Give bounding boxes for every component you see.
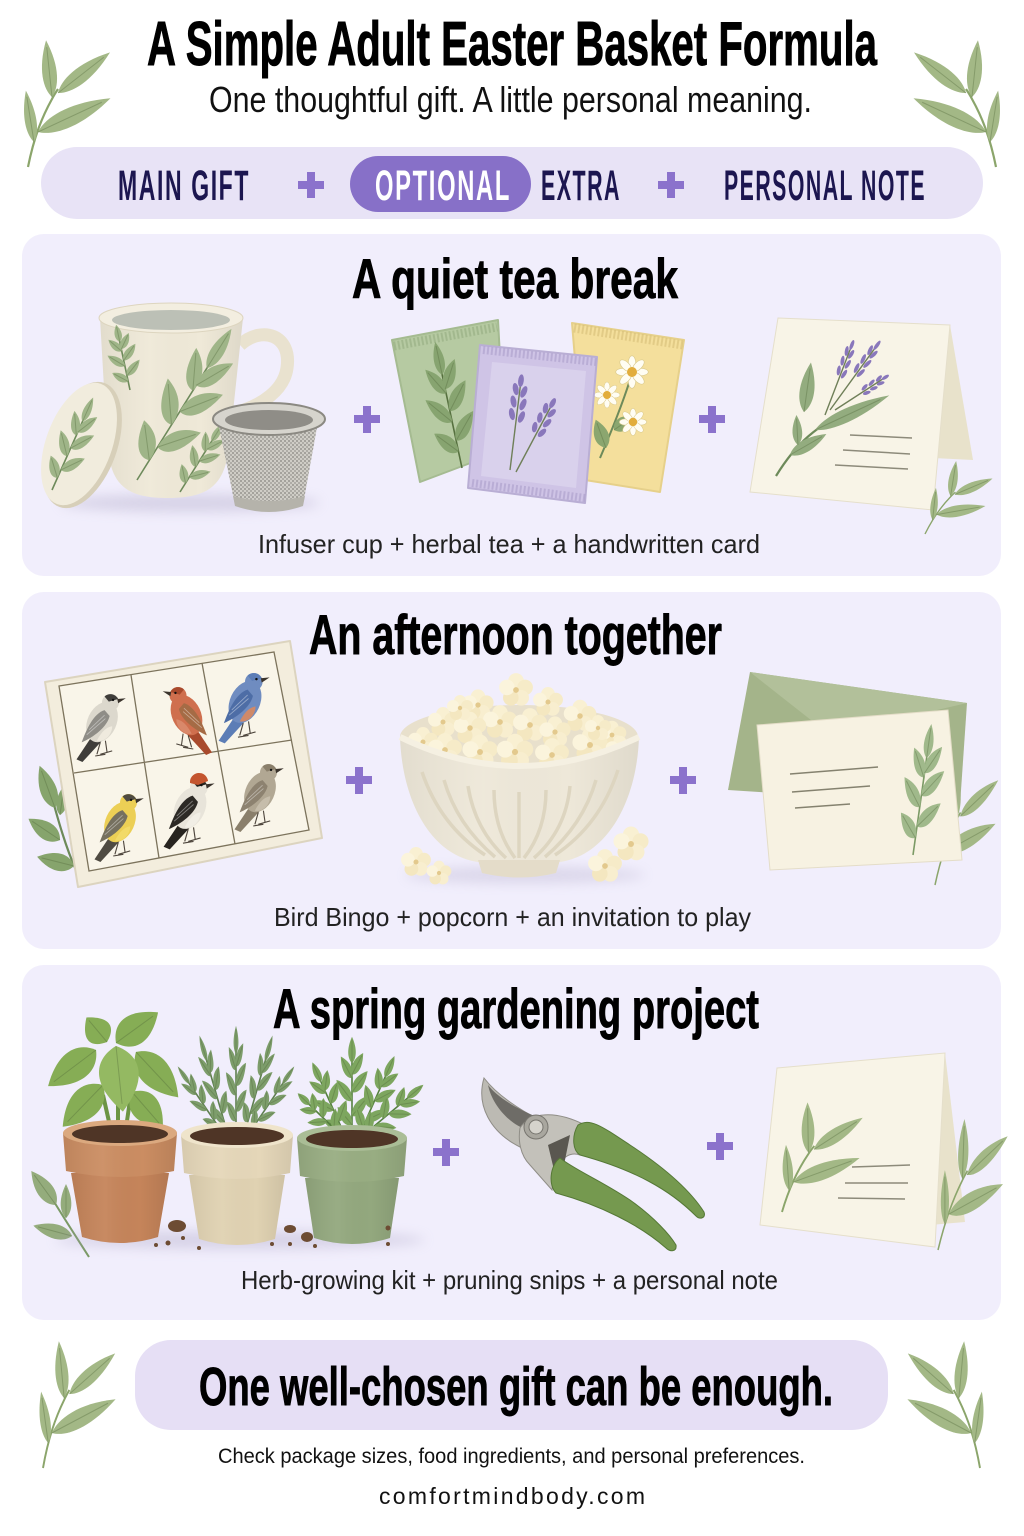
caption: Infuser cup + herbal tea + a handwritten card	[258, 529, 760, 559]
invitation and envelope	[728, 672, 1002, 889]
heading: A quiet tea break	[352, 247, 679, 310]
infuser	[213, 403, 325, 512]
sprig	[930, 764, 1002, 889]
plus icon	[354, 406, 380, 433]
decorative sprig: bottom left	[36, 1341, 119, 1468]
herbal tea sachets	[392, 320, 684, 503]
plus icon	[707, 1133, 733, 1160]
infuser cup illustration	[26, 303, 325, 519]
formula bar	[41, 147, 983, 219]
green sachet	[392, 320, 505, 482]
decorative sprig: top left	[20, 40, 115, 167]
plus icon	[699, 406, 725, 433]
panel: an afternoon together	[22, 592, 1002, 949]
website: comfortmindbody.com	[379, 1483, 645, 1509]
heading: A spring gardening project	[273, 977, 759, 1040]
caption: Bird Bingo + popcorn + an invitation to play	[274, 902, 751, 932]
panel: a quiet tea break	[22, 234, 1001, 576]
panel: a spring gardening project	[22, 965, 1012, 1320]
sprig	[933, 1116, 1012, 1256]
bird: bluebird	[219, 673, 270, 743]
bird bingo board	[45, 641, 322, 887]
bird: sparrow	[234, 764, 284, 832]
bird: yellow warbler	[94, 794, 144, 862]
spilled soil	[154, 1220, 390, 1250]
heading: An afternoon together	[309, 603, 722, 666]
subtitle: One thoughtful gift. A little personal meaning.	[209, 79, 812, 120]
pruning snips	[482, 1078, 704, 1251]
herb pots	[39, 1000, 435, 1250]
sprig	[24, 763, 76, 874]
lid	[26, 371, 137, 519]
bird: cardinal	[163, 687, 212, 755]
plus icon	[658, 172, 684, 198]
caption: Herb-growing kit + pruning snips + a personal note	[241, 1265, 778, 1295]
label: main gift: MAIN GIFT	[118, 162, 250, 210]
popcorn bowl	[400, 673, 649, 884]
yellow sachet	[572, 323, 684, 492]
decorative sprig: top right	[909, 40, 1004, 167]
decorative sprig: bottom right	[904, 1341, 987, 1468]
plus icon	[433, 1139, 459, 1166]
loose popcorn	[401, 826, 649, 884]
closing banner	[135, 1340, 888, 1430]
plus icon	[298, 172, 324, 198]
plus icon	[346, 767, 372, 794]
thyme pot	[168, 1026, 304, 1245]
oregano pot	[286, 1037, 435, 1244]
optional badge	[350, 156, 531, 212]
sprig	[25, 1166, 89, 1257]
sprig	[920, 456, 997, 548]
bird: chickadee	[76, 694, 126, 762]
disclaimer: Check package sizes, food ingredients, and personal preferences.	[218, 1445, 805, 1468]
plus icon	[670, 767, 696, 794]
bird: woodpecker	[164, 773, 215, 849]
basil pot	[39, 1000, 189, 1243]
handwritten card	[750, 318, 973, 510]
personal note card	[760, 1053, 965, 1247]
optional badge: OPTIONAL	[375, 162, 511, 210]
formula bar: EXTRA	[541, 162, 621, 210]
lavender sachet	[468, 345, 597, 503]
